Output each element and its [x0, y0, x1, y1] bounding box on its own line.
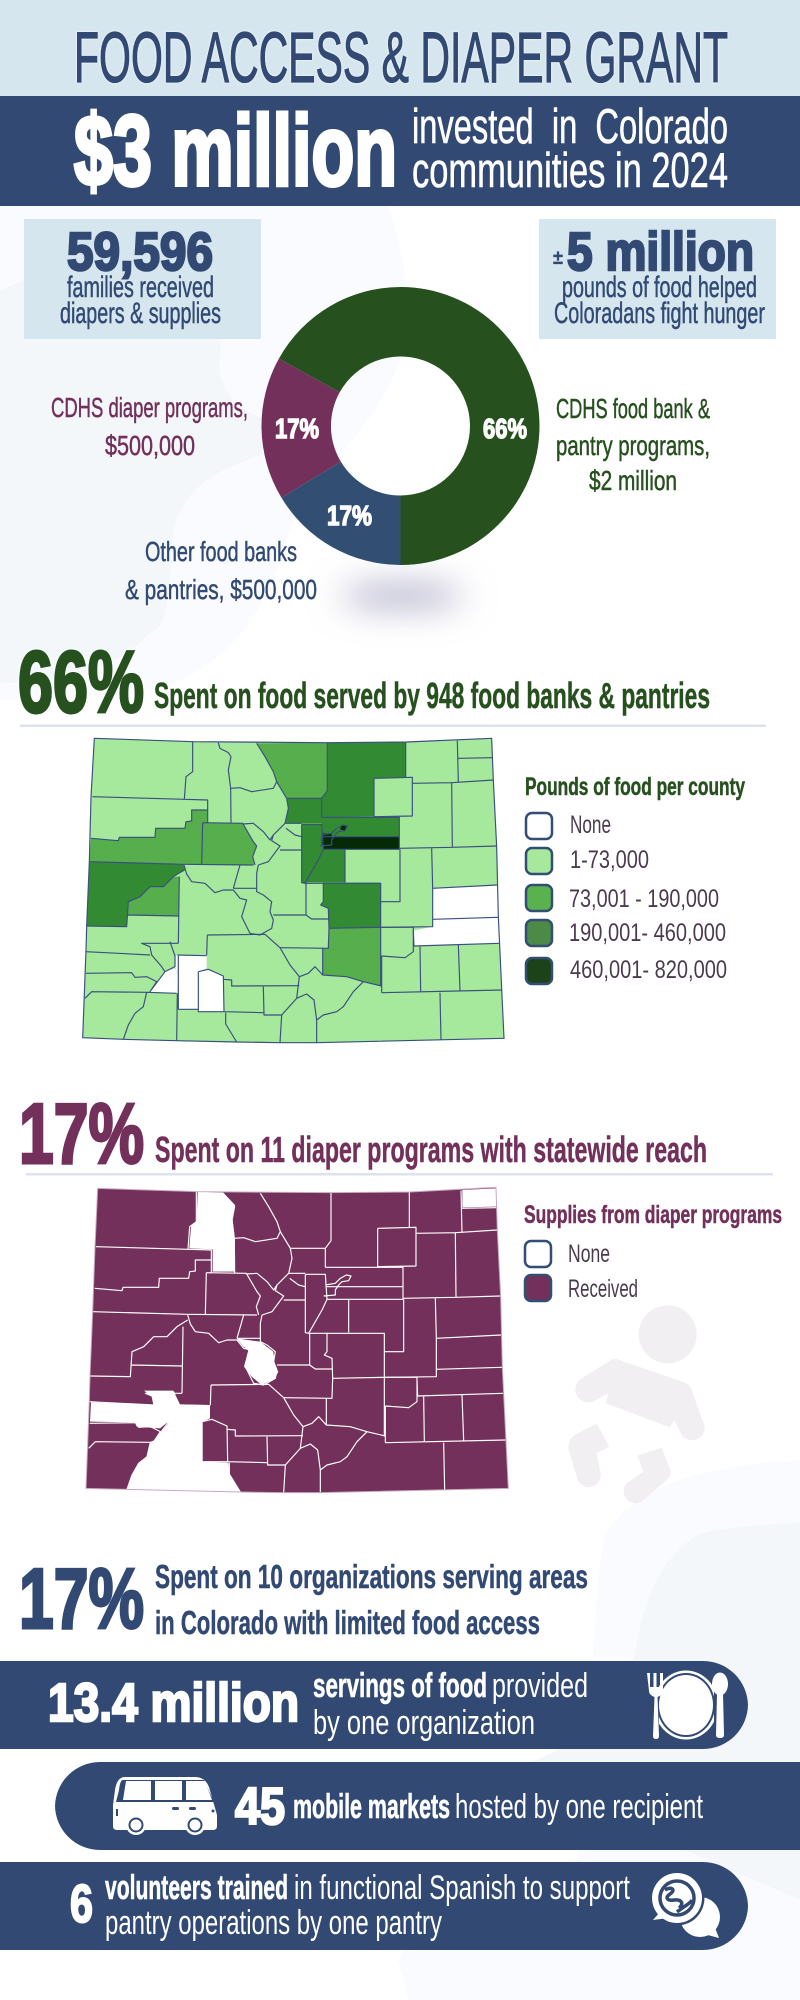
donut label: diaper programs — [51, 392, 248, 461]
headline band: $3 million — [0, 95, 800, 207]
bar: volunteers: pantry operations by one pantry — [105, 1904, 442, 1942]
legend item none: None — [570, 811, 611, 839]
heading: 17% food access: 17% — [19, 1552, 144, 1647]
bar: volunteers — [0, 1862, 748, 1950]
donut chart — [262, 287, 540, 565]
icon: plate and cutlery — [645, 1670, 730, 1740]
legend item 460,001-820,000: 460,001- 820,000 — [570, 956, 727, 984]
bar: volunteers: in functional Spanish to support — [294, 1869, 630, 1907]
segment green 66% — [279, 287, 540, 565]
segment maroon 17% — [262, 359, 341, 498]
legend item 1-73,000: 1-73,000 — [570, 846, 649, 874]
donut label: food bank programs: CDHS food bank & — [556, 393, 710, 424]
bar: servings of food: provided — [492, 1667, 588, 1705]
legend item received — [525, 1275, 638, 1303]
bar: mobile markets: hosted by one recipient — [455, 1788, 703, 1826]
stat box: families: 59,596 — [67, 222, 213, 282]
legend item none: None — [568, 1240, 610, 1268]
heading: 17% diaper — [19, 1087, 707, 1182]
stat box: pounds: 5 million — [567, 222, 754, 282]
bar: servings of food: by one organization — [313, 1704, 535, 1742]
icon: chat globe — [650, 1870, 720, 1938]
big amount: $3 million — [74, 95, 397, 207]
title band — [0, 0, 800, 98]
donut values — [275, 413, 527, 531]
heading: 66% — [18, 634, 710, 731]
legend item 190,001-460,000 — [526, 919, 726, 947]
segment navy 17% — [281, 462, 400, 565]
legend item 73,001-190,000 — [526, 885, 719, 913]
legend item none — [525, 1240, 610, 1268]
heading: 17% food access: Spent on 10 organizations serving areas — [155, 1558, 588, 1595]
donut values: 17% — [275, 413, 319, 444]
stat box: pounds — [539, 219, 776, 339]
heading: 17% food access — [19, 1552, 588, 1647]
donut label: other food banks — [125, 536, 317, 605]
heading: 17% diaper: 17% — [19, 1087, 144, 1182]
legend item 460,001-820,000 — [526, 956, 727, 984]
bar: servings of food — [0, 1661, 748, 1749]
donut label: diaper programs: $500,000 — [105, 430, 195, 461]
legend item none — [526, 811, 611, 839]
bar: mobile markets: 45 — [235, 1778, 285, 1836]
donut label: other food banks: Other food banks — [145, 536, 297, 567]
legend item 190,001-460,000: 190,001- 460,000 — [569, 919, 726, 947]
donut label: other food banks: & pantries, $500,000 — [125, 574, 317, 605]
headline text — [412, 100, 728, 198]
donut label: diaper programs: CDHS diaper programs, — [51, 392, 248, 423]
donut label: food bank programs: pantry programs, — [556, 430, 710, 461]
bar: mobile markets — [55, 1762, 800, 1850]
stat box: families: diapers & supplies — [60, 297, 221, 330]
stat box: families: families received — [67, 271, 214, 304]
icon: bus — [113, 1777, 217, 1835]
map: diaper supplies — [86, 1187, 508, 1493]
heading: 66%: 66% — [18, 634, 144, 731]
donut label: food bank programs — [556, 393, 710, 496]
legend: pounds of food — [525, 773, 745, 984]
bar: mobile markets: mobile markets — [293, 1788, 450, 1826]
legend item 1-73,000 — [526, 846, 649, 874]
donut values: 66% — [483, 413, 527, 444]
bar: servings of food: 13.4 million — [48, 1673, 299, 1733]
stat box: families — [24, 219, 261, 339]
map: pounds of food per county — [83, 738, 504, 1043]
legend item 73,001-190,000: 73,001 - 190,000 — [569, 885, 719, 913]
bar: volunteers: volunteers trained — [105, 1869, 288, 1907]
bar: volunteers: 6 — [70, 1874, 93, 1934]
stat box: pounds: ± — [553, 247, 563, 269]
donut label: food bank programs: $2 million — [589, 465, 677, 496]
legend item received: Received — [568, 1275, 638, 1303]
bar: servings of food: servings of food — [313, 1667, 487, 1705]
icon: baby watermark — [568, 1305, 705, 1503]
donut values: 17% — [327, 500, 372, 531]
donut shadow — [340, 585, 464, 607]
heading: 17% food access: in Colorado with limited food access — [155, 1604, 540, 1641]
legend: diaper supplies — [524, 1201, 782, 1303]
